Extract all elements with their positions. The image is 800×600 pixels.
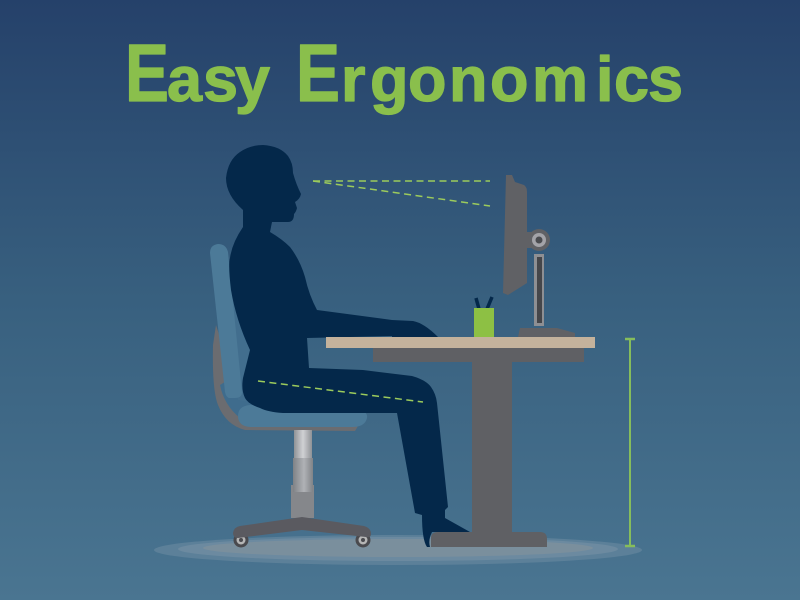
chair shell xyxy=(213,325,358,431)
chair backrest xyxy=(210,244,242,398)
desk leg xyxy=(472,360,512,535)
desk xyxy=(326,337,595,547)
monitor stand column xyxy=(534,254,544,326)
title: asy xyxy=(167,45,270,115)
title: E xyxy=(125,28,169,119)
chair wheels xyxy=(234,532,370,548)
desk under-panel xyxy=(373,347,584,362)
chair column xyxy=(291,430,314,518)
monitor xyxy=(503,175,575,337)
thigh level line xyxy=(258,381,423,402)
pens xyxy=(476,297,492,309)
floor shadow xyxy=(154,535,642,565)
desk top xyxy=(326,337,595,348)
desk height measure xyxy=(625,338,635,547)
monitor stand base xyxy=(518,328,575,337)
title: rgonomics xyxy=(341,45,683,115)
chair seat cushion xyxy=(238,405,367,427)
sight lines xyxy=(313,181,490,206)
monitor screen xyxy=(503,175,527,295)
chair shell interior xyxy=(220,380,262,420)
chair base xyxy=(233,517,371,538)
desk foot xyxy=(431,532,547,547)
office chair xyxy=(210,244,371,548)
person silhouette xyxy=(226,145,470,547)
title: E xyxy=(296,28,340,119)
pen cup xyxy=(474,297,494,337)
monitor pivot xyxy=(532,233,546,247)
monitor arm xyxy=(526,229,550,251)
chair backrest rear panel xyxy=(232,295,252,402)
